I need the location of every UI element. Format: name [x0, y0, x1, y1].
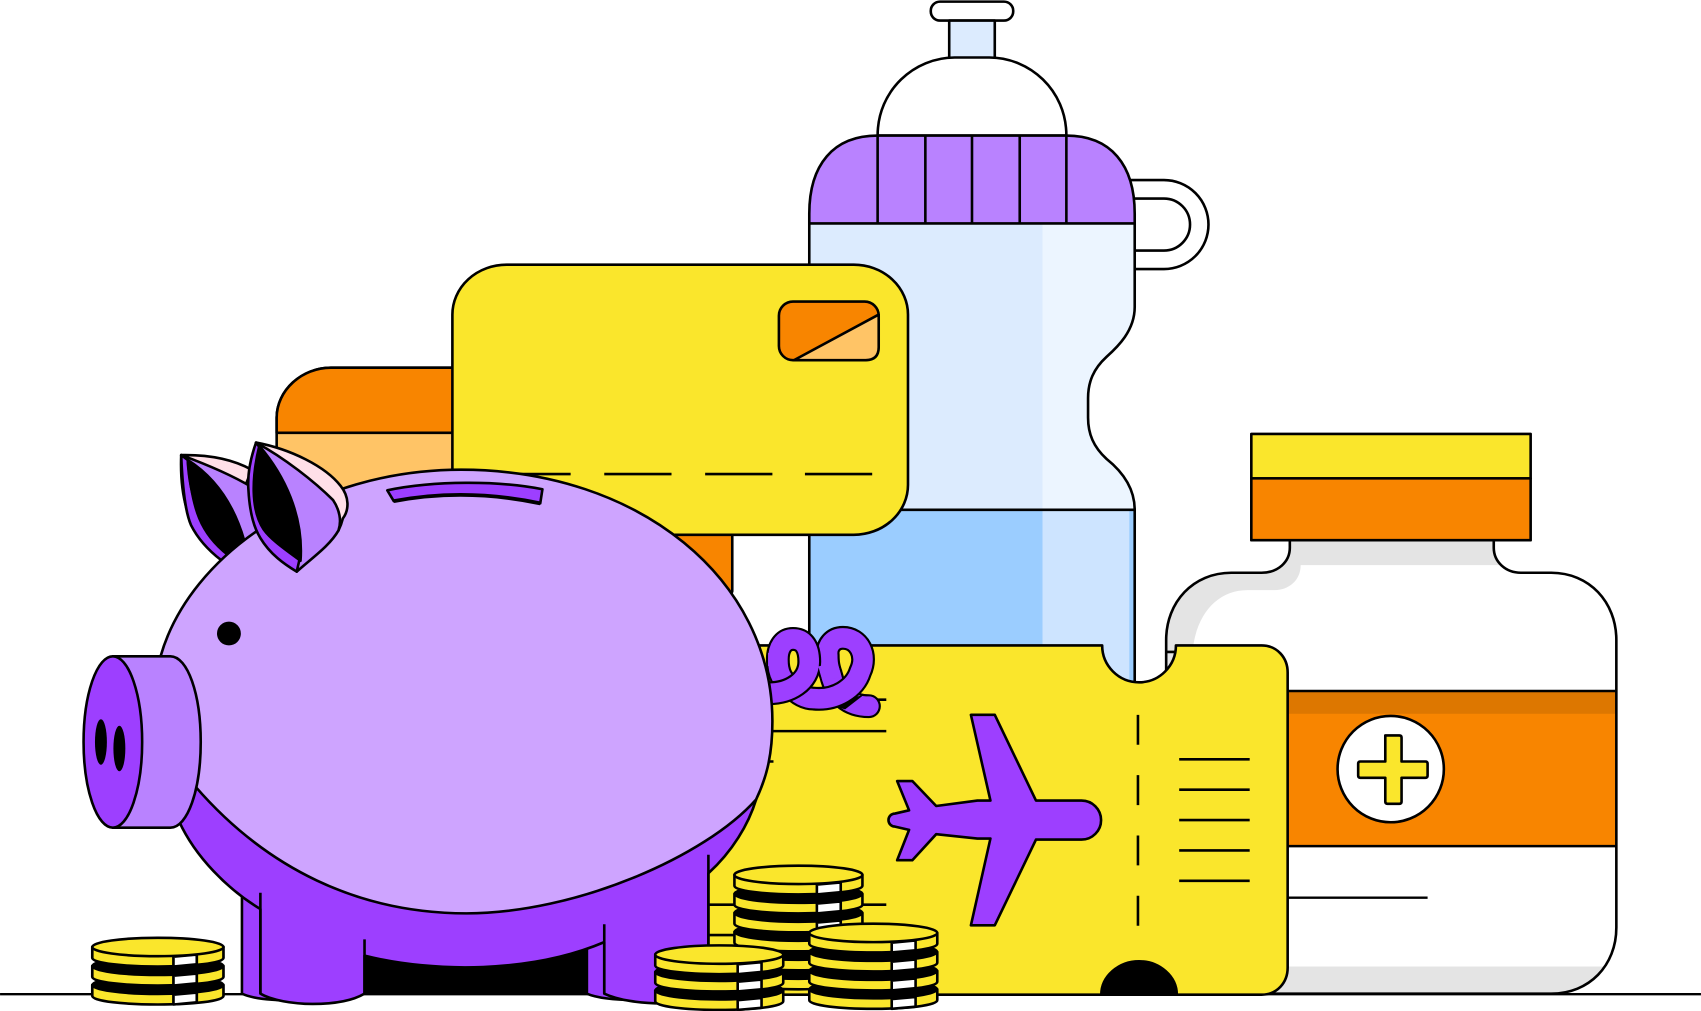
pig tail: [766, 638, 869, 709]
front ear: [248, 443, 347, 572]
card body: [277, 368, 488, 607]
jar label: [1166, 691, 1616, 846]
jar shadow: [1161, 540, 1616, 998]
jar label line: [1280, 897, 1428, 899]
coin stack front: [655, 945, 783, 1010]
lower body: [179, 786, 756, 1004]
coin slot: [387, 483, 542, 503]
bottle outline: [809, 223, 1135, 694]
jar body: [1166, 540, 1616, 994]
ticket bottom notch: [1101, 961, 1177, 995]
leg lines: [260, 855, 708, 994]
coin stack right: [809, 924, 937, 1009]
bottle shoulder: [809, 136, 1135, 223]
piggy bank: [84, 443, 772, 1004]
back ear: [181, 455, 271, 561]
medical cross badge: [1338, 716, 1444, 822]
bottle highlight: [1043, 223, 1135, 510]
coin stack far left: [92, 938, 223, 1004]
jar outline: [1166, 540, 1616, 994]
coin stack tall: [734, 866, 862, 989]
ground line: [0, 993, 1701, 995]
card chip: [779, 302, 879, 360]
ticket perforation: [1137, 715, 1139, 926]
card header: [277, 368, 488, 433]
water bottle: [809, 2, 1208, 694]
bottle dome: [878, 57, 1066, 136]
upper body: [161, 470, 772, 913]
tail second loop: [778, 638, 863, 699]
plane ticket: [694, 645, 1288, 995]
belly shadow: [358, 944, 591, 994]
bottle cap: [931, 2, 1013, 21]
jar lid: [1251, 434, 1531, 540]
bottle handle: [1128, 180, 1208, 269]
bottle body: [809, 223, 1135, 694]
airplane icon: [888, 715, 1101, 925]
back legs: [242, 890, 673, 1001]
jar label shade: [1166, 691, 1616, 714]
bottle water: [809, 510, 1135, 694]
tail tip: [831, 675, 869, 709]
rear orange card: [277, 368, 732, 607]
ticket left lines: [705, 700, 886, 935]
ticket right lines: [1179, 759, 1250, 881]
yellow credit card: [452, 265, 908, 535]
bottle neck: [949, 21, 995, 59]
medicine jar: [1161, 434, 1616, 998]
shoulder ribs: [878, 136, 1066, 223]
tail joins: [778, 653, 832, 679]
snout: [84, 656, 201, 828]
ticket body: [694, 645, 1288, 995]
eye: [217, 622, 241, 645]
card lower corner: [651, 521, 732, 607]
tail first loop: [766, 639, 809, 693]
card number dashes: [503, 473, 872, 475]
